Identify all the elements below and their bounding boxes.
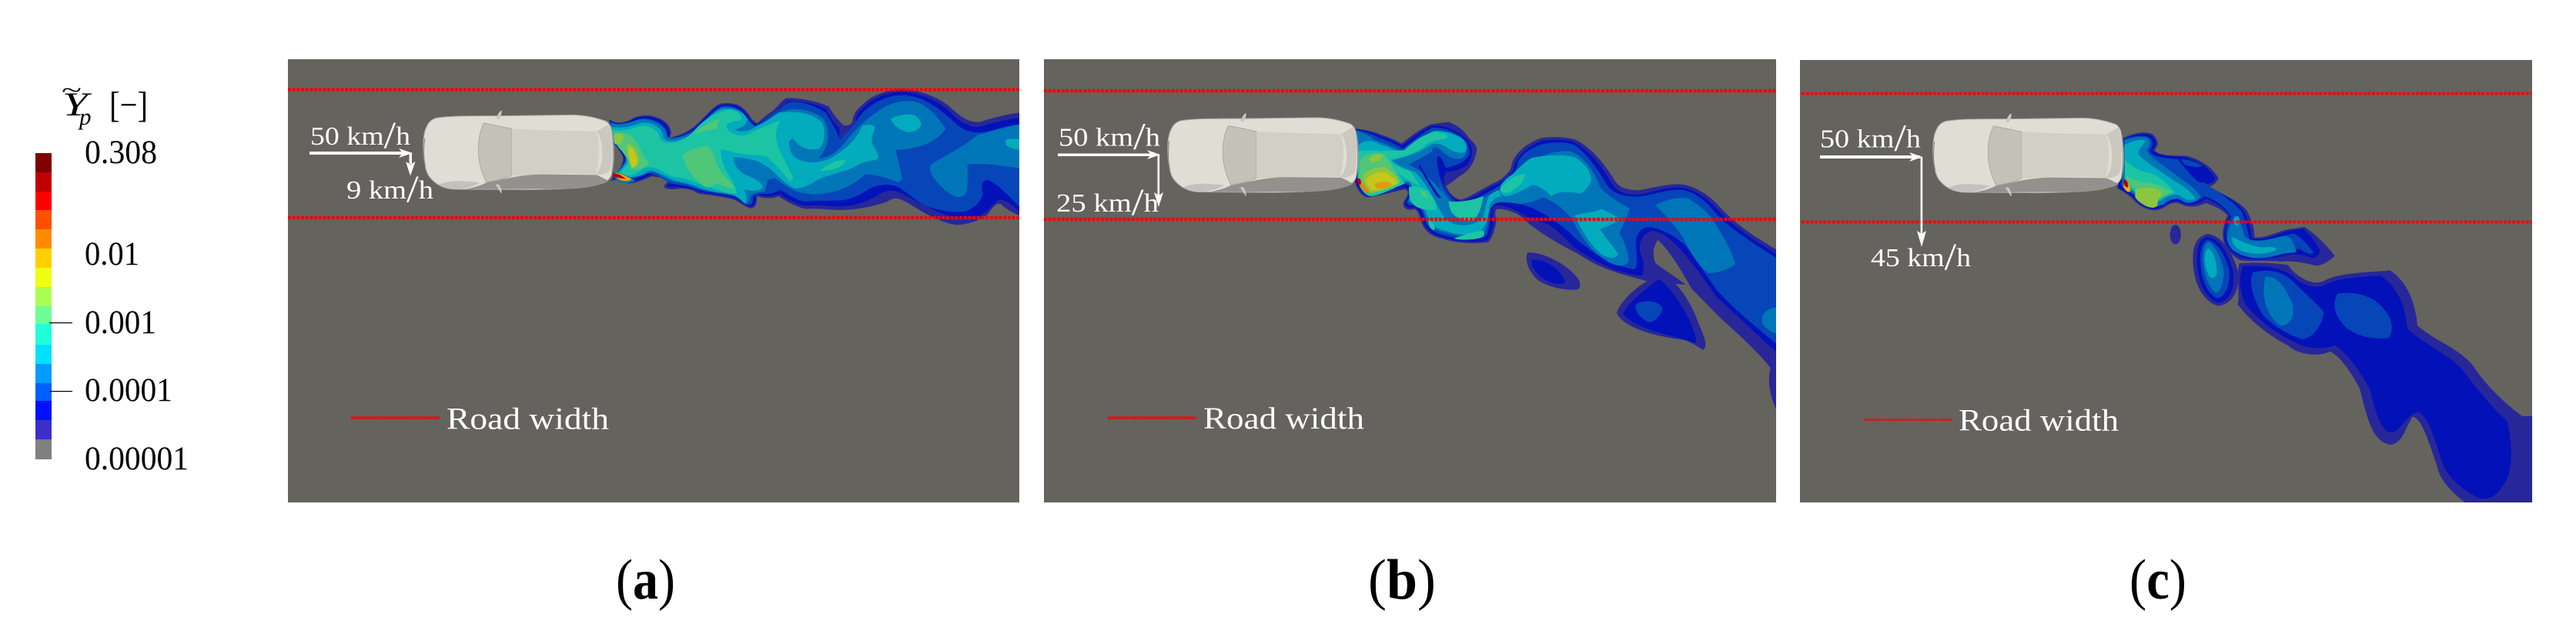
speed labels a: 50 km [310,122,376,151]
speed labels c: h [1956,244,1971,272]
legend tick labels: 0.0001 [85,372,172,409]
speed labels b: / [1132,180,1144,223]
speed labels c: h [1906,125,1921,154]
caption (a): (a) [616,549,675,612]
speed labels c [1820,115,1971,278]
speed labels a: / [406,167,419,210]
legend title: p [78,103,91,130]
panel b background [1044,59,1776,502]
car c [1933,113,2123,197]
speed labels a [310,113,433,210]
plume b [1353,122,1776,409]
panel c background [1800,60,2532,502]
speed labels a: h [396,122,410,151]
plume c: downstream [2170,225,2532,502]
speed labels a: h [419,176,433,205]
legend tick labels: 0.00001 [85,441,189,477]
panel a background [288,59,1019,502]
plume c: near wake [2117,132,2335,265]
road width lines b [1044,91,1776,219]
speed labels b [1056,114,1160,223]
plume a [610,89,1019,225]
speed labels b: 25 km [1056,189,1122,218]
speed labels b: h [1146,123,1160,152]
car a [423,110,614,194]
speed arrows b [1058,150,1163,207]
legend tick labels [85,135,189,477]
legend title: [−] [109,85,148,125]
legend tick labels: 0.308 [85,135,157,171]
speed labels b: h [1144,189,1159,218]
legend tick labels: 0.01 [85,236,139,272]
speed labels c: 45 km [1871,244,1937,272]
speed arrows c [1820,152,1926,247]
legend tick labels: 0.001 [85,305,156,341]
speed labels a: / [384,113,396,156]
caption (b): (b) [1368,549,1436,612]
caption (c): (c) [2129,549,2186,612]
speed labels c: / [1894,115,1906,158]
legend title: ~ [62,78,82,103]
road width key c: Road width [1959,403,2119,437]
panel a: 9 km/h crosswind [288,59,1019,502]
road width lines [288,89,1019,218]
road width lines c [1802,94,2531,222]
speed labels b: 50 km [1059,123,1125,152]
panel c: 45 km/h crosswind [1800,60,2532,502]
speed labels b: / [1133,114,1146,157]
speed labels c: 50 km [1820,125,1886,154]
colour legend [35,78,189,477]
legend title [62,78,148,130]
panel b: 25 km/h crosswind [1044,59,1776,502]
colour bar [35,153,72,459]
car b [1168,113,1358,196]
legend title: Y [62,87,92,123]
speed labels a: 9 km [346,176,400,205]
road width key b: Road width [1203,401,1364,435]
speed labels c: / [1945,235,1956,278]
road width key a: Road width [447,402,609,435]
speed arrows a [309,148,416,175]
